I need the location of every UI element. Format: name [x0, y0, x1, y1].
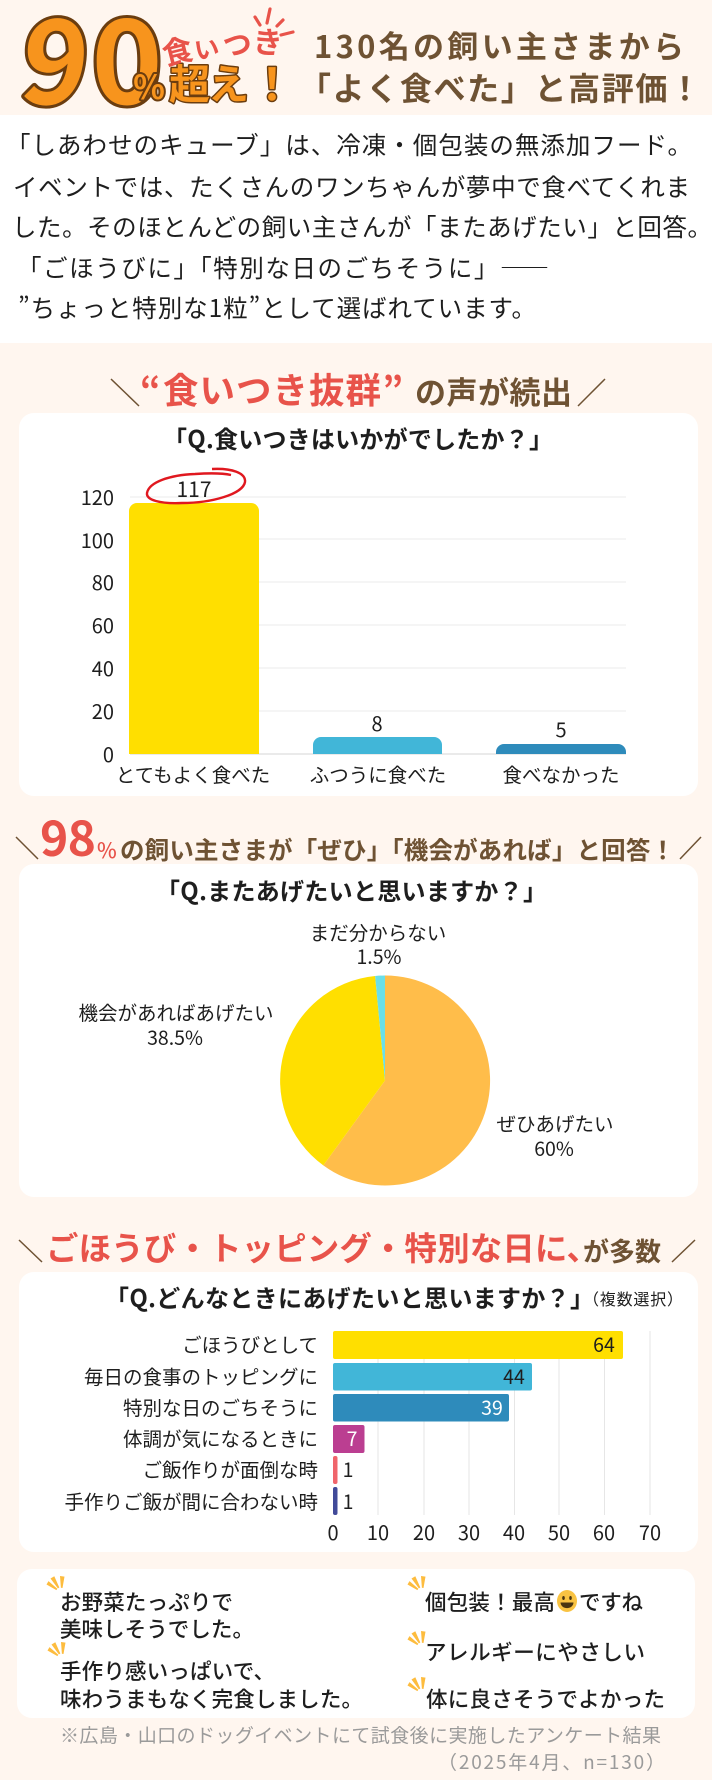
footnote: ※広島・山口のドッグイベントにて試食後に実施したアンケート結果	[60, 1721, 661, 1748]
value labels: 117	[177, 474, 211, 504]
comments left	[60, 1586, 363, 1714]
section heading 2	[16, 800, 701, 870]
intro text block	[6, 127, 712, 325]
bar values: 64	[593, 1329, 615, 1358]
value labels: 8	[371, 708, 383, 737]
category labels: 体調が気になるときに	[123, 1423, 318, 1452]
x axis labels	[327, 1517, 661, 1546]
y axis labels: 0	[103, 739, 114, 768]
pie labels: ぜひあげたい	[496, 1108, 614, 1137]
intro text block: 「ごほうびに」「特別な日のごちそうに」——	[17, 250, 549, 285]
bar values: 44	[503, 1361, 525, 1390]
食いつき red arc text: つ	[221, 21, 253, 65]
note: （複数選択）	[583, 1286, 683, 1310]
bars	[129, 503, 626, 754]
intro text block: ”ちょっと特別な1粒”として選ばれています。	[18, 290, 536, 325]
question title: 「Q.どんなときにあげたいと思いますか？」	[105, 1279, 594, 1314]
section heading 1: 食いつき抜群	[163, 363, 381, 414]
comments right: 体に良さそうでよかった	[426, 1683, 665, 1714]
bar values: 7	[347, 1423, 357, 1452]
pie labels: 60%	[534, 1133, 574, 1162]
section heading 3: ごほうび・トッピング・特別な日に、	[46, 1223, 599, 1270]
bar values: 39	[481, 1392, 503, 1421]
category labels: 食べなかった	[502, 759, 620, 788]
x axis labels: 0	[327, 1517, 339, 1546]
y axis labels: 20	[92, 696, 114, 725]
category labels	[64, 1329, 318, 1515]
y axis labels: 60	[92, 610, 114, 639]
pie labels: 38.5%	[147, 1022, 203, 1051]
intro text block: 「しあわせのキューブ」は、冷凍・個包装の無添加フード。	[6, 127, 692, 162]
panel: pie chart	[19, 864, 698, 1197]
pie labels: 機会があればあげたい	[78, 997, 274, 1026]
percent sign: %	[133, 61, 165, 109]
section heading 1	[111, 362, 605, 414]
y axis labels	[81, 482, 114, 768]
question title: 「Q.またあげたいと思いますか？」	[156, 872, 547, 907]
食いつき red arc text: い	[192, 29, 221, 68]
question title: 「Q.食いつきはいかがでしたか？」	[163, 420, 553, 455]
category labels	[116, 759, 620, 788]
header title	[299, 22, 701, 110]
category labels: 手作りご飯が間に合わない時	[64, 1486, 318, 1515]
x axis labels: 50	[548, 1517, 570, 1546]
sparkle icons	[46, 1576, 426, 1691]
x axis labels: 30	[458, 1517, 480, 1546]
x axis labels: 70	[639, 1517, 661, 1546]
panel: owner comments	[17, 1569, 695, 1718]
comments right	[425, 1586, 665, 1714]
section heading 1: の声が続出	[415, 368, 572, 413]
category labels: 毎日の食事のトッピングに	[84, 1361, 318, 1390]
超え！: ！	[250, 49, 294, 113]
comments left: お野菜たっぷりで	[60, 1586, 233, 1617]
section heading 2: の飼い主さまが「ぜひ」「機会があれば」と回答！	[120, 832, 675, 867]
intro text block: した。そのほとんどの飼い主さんが「またあげたい」と回答。	[12, 209, 712, 244]
category labels: とてもよく食べた	[116, 759, 270, 788]
y axis labels: 120	[81, 482, 114, 511]
x axis labels: 40	[503, 1517, 525, 1546]
bar values: 1	[343, 1486, 353, 1515]
y axis labels: 80	[92, 567, 114, 596]
comments left: 味わうまもなく完食しました。	[60, 1683, 363, 1714]
section heading 2: %	[97, 835, 117, 865]
comments right: アレルギーにやさしい	[425, 1636, 645, 1667]
intro text block: イベントでは、たくさんのワンちゃんが夢中で食べてくれま	[13, 169, 690, 204]
x axis labels: 60	[593, 1517, 615, 1546]
comments left: 手作り感いっぱいで、	[60, 1655, 275, 1686]
section heading 1: ”	[382, 362, 403, 414]
category labels: 特別な日のごちそうに	[123, 1392, 318, 1421]
panel: horizontal bar chart	[19, 1272, 698, 1552]
食いつき red arc text	[157, 17, 284, 74]
comments right: ですね	[579, 1586, 643, 1617]
bars	[333, 1331, 623, 1515]
食いつき red arc text: 食	[157, 24, 197, 74]
category labels: ごほうびとして	[182, 1329, 318, 1358]
超え！	[169, 49, 294, 113]
category labels: ご飯作りが面倒な時	[142, 1454, 318, 1483]
footnote: （2025年4月、n=130）	[438, 1748, 665, 1775]
x axis labels: 10	[367, 1517, 389, 1546]
big number 90	[14, 0, 163, 137]
comments right: 個包装！最高	[425, 1586, 555, 1617]
超え！: 超え	[169, 51, 249, 111]
header title: 130名の飼い主さまから	[314, 22, 684, 67]
食いつき red arc text: き	[251, 17, 284, 63]
value labels	[177, 474, 567, 743]
header title: 「よく食べた」と高評価！	[299, 64, 701, 110]
header badge: 食いつき90%超え！	[14, 0, 294, 137]
pie	[280, 976, 490, 1186]
icon: smile emoji	[557, 1590, 577, 1612]
footnote	[60, 1721, 665, 1775]
pie labels: 1.5%	[356, 941, 402, 970]
y axis labels: 40	[92, 653, 114, 682]
section heading 3: が多数	[583, 1232, 661, 1269]
x axis labels: 20	[413, 1517, 435, 1546]
red hand-drawn circle	[147, 469, 245, 503]
bar values: 1	[343, 1454, 353, 1483]
y axis labels: 100	[81, 525, 114, 554]
burst lines	[255, 9, 293, 35]
panel: bar chart 食いつき	[19, 413, 698, 796]
pie labels: まだ分からない	[310, 917, 446, 946]
section heading 1: “	[140, 362, 161, 414]
comments left: 美味しそうでした。	[60, 1613, 254, 1644]
value labels: 5	[555, 714, 567, 743]
category labels: ふつうに食べた	[310, 759, 446, 788]
bar values	[343, 1329, 615, 1515]
section heading 2: 98	[40, 800, 96, 870]
pie labels	[78, 917, 614, 1162]
